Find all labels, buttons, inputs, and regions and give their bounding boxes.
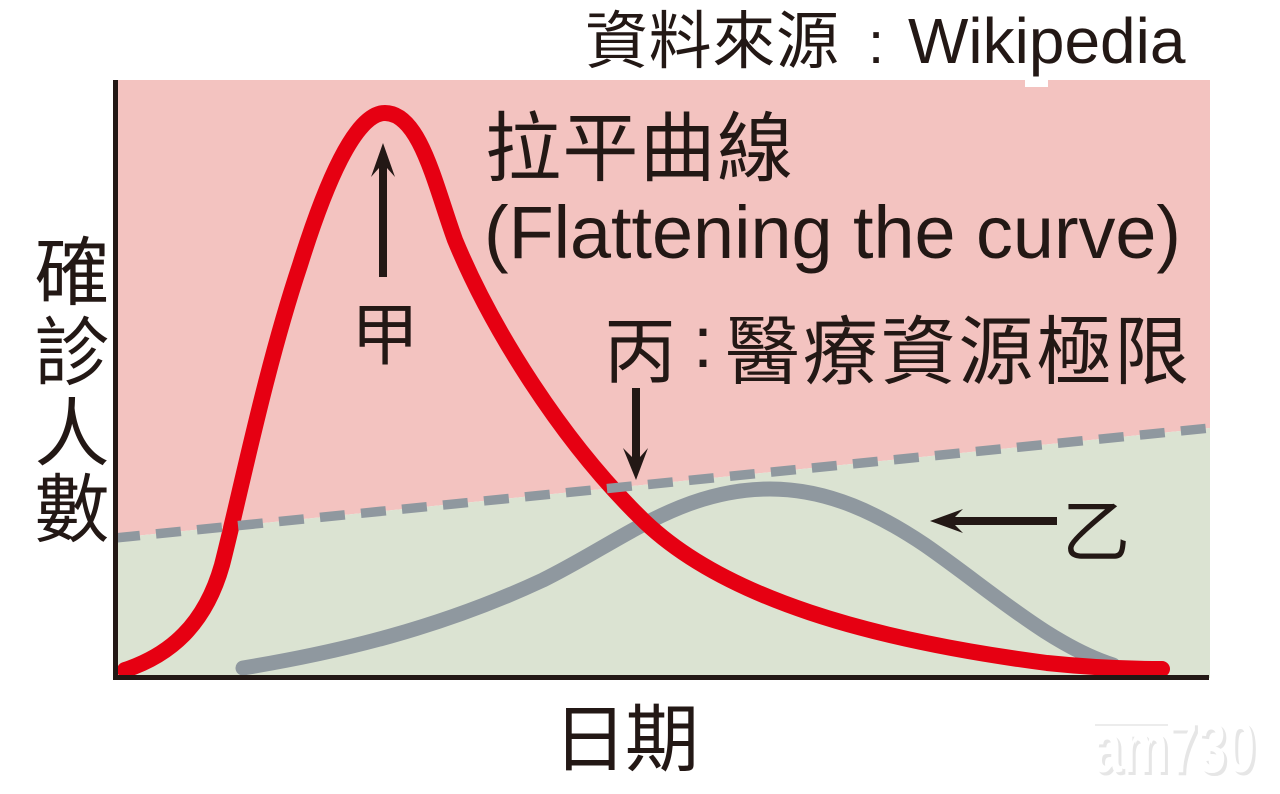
arrow: up to peak — [371, 143, 395, 277]
y axis label: 數 — [34, 468, 110, 552]
source note — [585, 5, 1186, 77]
y axis label: 診 — [34, 311, 110, 395]
y axis label — [34, 231, 110, 552]
label: 乙: 乙 — [1062, 495, 1130, 571]
chart title — [484, 107, 1181, 274]
arrow: left to curve B — [930, 509, 1057, 533]
label: curve A with arrow — [351, 143, 419, 374]
label: medical resource limit: 醫療資源極限 — [725, 310, 1189, 394]
chart title: (Flattening the curve) — [484, 191, 1181, 274]
label: 甲: 甲 — [351, 298, 419, 374]
label: colon: : — [693, 303, 713, 383]
label: capacity limit with arrow — [604, 303, 1189, 480]
source note: Wikipedia — [908, 5, 1186, 77]
y axis label: 人 — [34, 392, 110, 476]
panel: area above the medical capacity line — [115, 80, 1210, 538]
label: 丙: 丙 — [604, 313, 676, 393]
axes — [116, 80, 1209, 678]
source note: : — [868, 11, 884, 76]
panel: area below the medical capacity line — [115, 428, 1210, 678]
x axis label: 日期 — [553, 698, 699, 781]
source note: 資料來源 — [585, 7, 839, 77]
arrow: down to dashed line — [623, 388, 648, 480]
label: curve B with arrow — [930, 495, 1130, 571]
curve: unmitigated curve A — [125, 113, 1162, 670]
curve: flattened curve B — [243, 489, 1113, 668]
y axis label: 確 — [34, 231, 110, 315]
chart title: 拉平曲線 — [485, 107, 793, 192]
dashed line: medical capacity limit — [115, 428, 1210, 538]
